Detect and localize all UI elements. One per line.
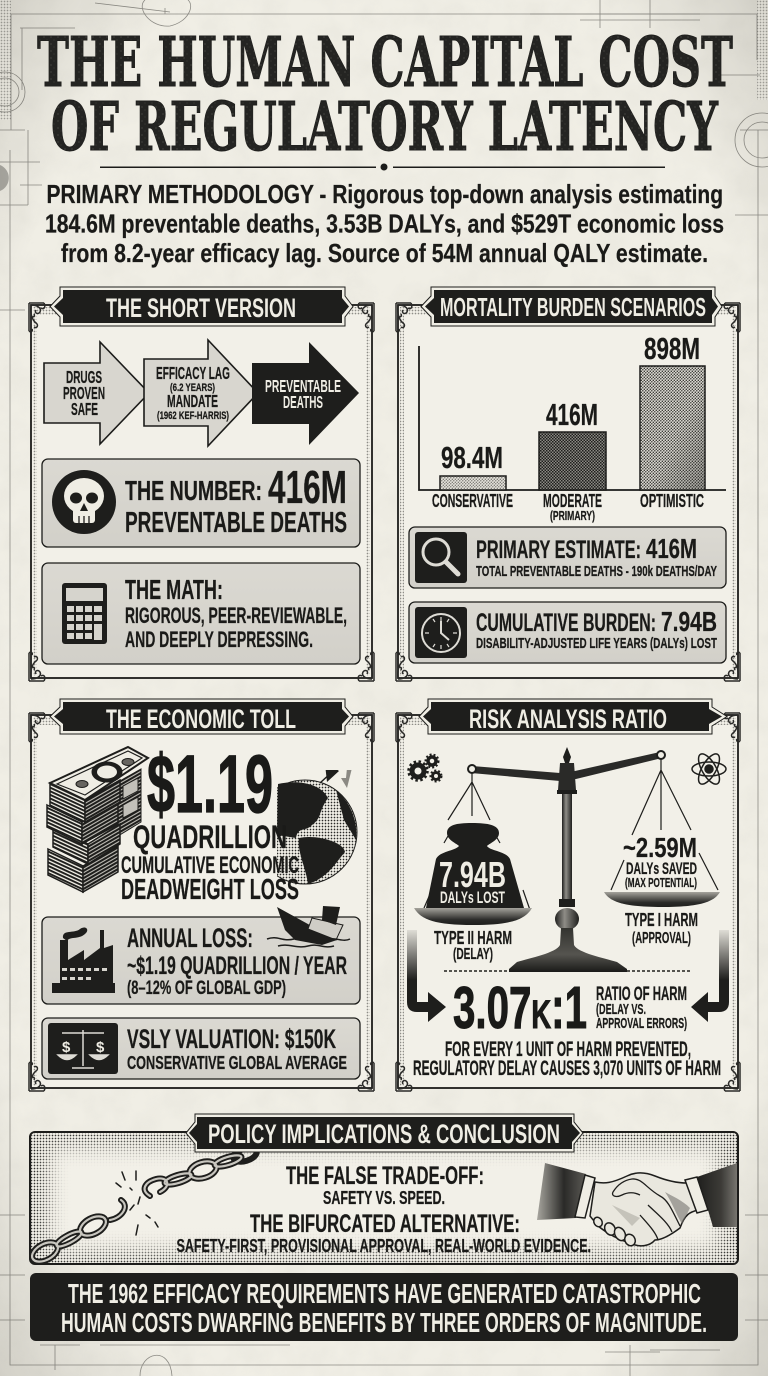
label: type II harm: (DELAY)	[453, 946, 493, 963]
callout: cumulative burden: CUMULATIVE BURDEN:	[476, 609, 656, 637]
panel: policy implications	[29, 1114, 738, 1266]
arrow: preventable deaths: PREVENTABLE	[265, 376, 341, 396]
arrow: efficacy lag mandate: EFFICACY LAG	[156, 363, 230, 383]
icon: dollar scales: $	[96, 1039, 105, 1056]
text block: trade-off and alternative: SAFETY VS. SPEED.	[323, 1188, 445, 1208]
callout: annual loss: (8–12% OF GLOBAL GDP)	[127, 977, 286, 999]
big figure: $1.19	[147, 739, 273, 830]
heading plate	[421, 287, 722, 326]
callout: the number	[42, 459, 360, 547]
callout: the math: RIGOROUS, PEER-REVIEWABLE,	[125, 603, 347, 628]
icon: dollar scales: $	[62, 1039, 71, 1056]
callout: primary estimate: PRIMARY ESTIMATE:	[476, 536, 641, 564]
label: type II harm: TYPE II HARM	[434, 928, 512, 948]
callout: annual loss: ~$1.19 QUADRILLION / YEAR	[127, 952, 347, 980]
callout: primary estimate: 416M	[646, 533, 697, 564]
heading plate	[50, 699, 353, 734]
weight	[426, 823, 524, 908]
bar chart: 416M	[546, 397, 598, 432]
big figure: DEADWEIGHT LOSS	[121, 874, 299, 906]
icon: dollar scales	[48, 1023, 118, 1074]
ratio explanation	[413, 1038, 721, 1080]
label: type II harm	[434, 854, 512, 963]
text block: trade-off and alternative: THE FALSE TRADE-OFF:	[286, 1162, 484, 1190]
label: type I harm: TYPE I HARM	[625, 910, 698, 930]
conclusion banner	[30, 1273, 738, 1341]
bar chart: OPTIMISTIC	[640, 491, 704, 511]
callout: annual loss	[42, 906, 360, 1004]
label: type I harm: (APPROVAL)	[632, 930, 691, 947]
ratio figure: APPROVAL ERRORS)	[596, 1015, 687, 1032]
title	[37, 23, 733, 166]
panel: the short version	[29, 287, 374, 681]
heading plate: THE ECONOMIC TOLL	[106, 704, 296, 734]
icon: skull	[52, 470, 116, 534]
callout: the number: 416M	[268, 461, 347, 513]
heading plate: RISK ANALYSIS RATIO	[469, 704, 667, 734]
text block: trade-off and alternative	[176, 1162, 591, 1256]
big figure: CUMULATIVE ECONOMIC	[121, 852, 299, 879]
arrow: drugs proven safe: DRUGS	[66, 367, 102, 387]
icon: handshake	[537, 1163, 737, 1248]
ratio figure: (DELAY VS.	[596, 1001, 646, 1018]
bar chart: 898M	[644, 331, 700, 366]
arrow: preventable deaths: DEATHS	[283, 392, 323, 412]
bar chart: (PRIMARY)	[550, 509, 595, 523]
icon: factory	[52, 928, 115, 993]
icon: magnifying glass	[415, 532, 467, 583]
arrow: efficacy lag mandate: (6.2 YEARS)	[170, 382, 215, 394]
heading plate	[50, 287, 353, 326]
callout: vsly valuation: VSLY VALUATION: $150K	[127, 1024, 336, 1054]
text block: trade-off and alternative: THE BIFURCATED ALTERNATIVE:	[250, 1210, 520, 1238]
heading plate	[419, 699, 727, 734]
icon: sinking ship	[267, 906, 350, 947]
bar chart: CONSERVATIVE	[432, 491, 513, 511]
callout: the math: AND DEEPLY DEPRESSING.	[125, 627, 313, 652]
callout: the number: PREVENTABLE DEATHS	[125, 507, 347, 539]
bar chart: 98.4M	[441, 440, 503, 475]
label: type I harm: ~2.59M	[623, 832, 697, 863]
ratio figure	[453, 975, 687, 1041]
text block: trade-off and alternative: SAFETY-FIRST, PROVISIONAL APPROVAL, REAL-WORLD EVIDENCE.	[176, 1236, 591, 1256]
arrow: preventable deaths	[252, 342, 359, 445]
callout: vsly valuation	[42, 1018, 360, 1079]
arrow: efficacy lag mandate: MANDATE	[167, 391, 218, 411]
ratio figure: 3.07K:1	[453, 975, 587, 1041]
arrow: right into ratio	[691, 930, 729, 1022]
arrow: drugs proven safe	[44, 342, 149, 444]
callout: vsly valuation: CONSERVATIVE GLOBAL AVERAGE	[127, 1053, 347, 1073]
panel: the economic toll	[29, 699, 374, 1091]
bar chart: MODERATE	[543, 491, 602, 511]
icon: atom	[692, 751, 726, 787]
panel: mortality burden scenarios	[396, 287, 740, 681]
callout: the number: THE NUMBER:	[125, 475, 262, 506]
arrow: efficacy lag mandate	[144, 340, 258, 446]
label: type I harm	[623, 832, 698, 947]
callout: cumulative burden	[409, 602, 726, 663]
bar chart	[419, 331, 726, 523]
arrow: drugs proven safe: SAFE	[71, 399, 98, 419]
callout: the math	[42, 563, 360, 664]
label: type II harm: 7.94B	[439, 854, 506, 895]
panel: risk analysis ratio	[396, 699, 740, 1091]
label: type I harm: (MAX POTENTIAL)	[625, 876, 697, 890]
icon: broken chain	[29, 1146, 258, 1266]
ratio figure: RATIO OF HARM	[596, 983, 687, 1005]
callout: the math: THE MATH:	[125, 574, 223, 605]
arrow: drugs proven safe: PROVEN	[63, 383, 105, 403]
arrow: efficacy lag mandate: (1962 KEF-HARRIS)	[157, 410, 229, 422]
icon: calculator	[62, 583, 107, 644]
subtitle	[45, 179, 724, 268]
heading plate	[186, 1114, 583, 1152]
icon: money stack	[47, 747, 148, 892]
label: type I harm: DALYs SAVED	[626, 859, 697, 878]
icon: gears	[408, 754, 442, 782]
icon: cracked globe	[277, 770, 358, 884]
callout: cumulative burden: 7.94B	[661, 606, 717, 637]
big figure	[121, 739, 299, 906]
heading plate: POLICY IMPLICATIONS & CONCLUSION	[208, 1119, 560, 1149]
balance scale	[414, 747, 720, 972]
callout: annual loss: ANNUAL LOSS:	[127, 923, 253, 953]
label: type II harm: DALYs LOST	[440, 888, 505, 907]
big figure: QUADRILLION	[133, 819, 287, 855]
divider ornament	[100, 164, 665, 170]
heading plate: THE SHORT VERSION	[106, 293, 296, 323]
icon: clock	[415, 607, 467, 658]
arrow: left into ratio	[407, 930, 446, 1022]
callout: primary estimate	[409, 527, 726, 588]
